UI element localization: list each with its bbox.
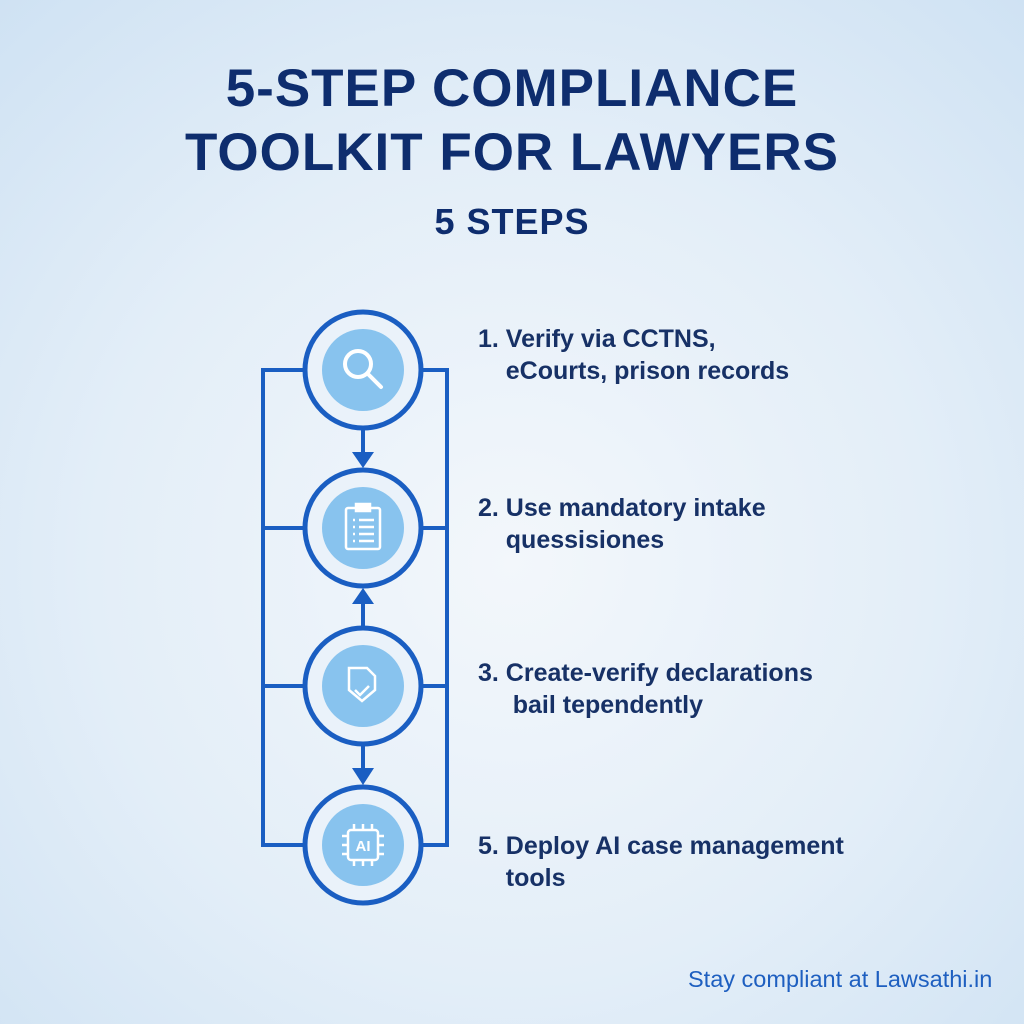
step 3 text: bail tependently bbox=[513, 691, 703, 719]
step 3 text bbox=[478, 659, 813, 719]
icon: clipboard bbox=[346, 504, 380, 549]
step 1 text bbox=[478, 325, 789, 385]
icon: magnifier bbox=[345, 351, 381, 387]
icon: shield document bbox=[349, 668, 375, 701]
subtitle: 5 STEPS bbox=[434, 201, 590, 242]
step 1 text: eCourts, prison records bbox=[506, 357, 789, 385]
step 5 text: tools bbox=[506, 864, 566, 892]
step 2 text: quessisiones bbox=[506, 526, 664, 554]
step 1 text: 1. Verify via CCTNS, bbox=[478, 325, 716, 353]
title bbox=[185, 59, 839, 182]
title: TOOLKIT FOR LAWYERS bbox=[185, 123, 839, 182]
step 5 text: 5. Deploy AI case management bbox=[478, 832, 844, 860]
step circles bbox=[305, 312, 421, 903]
step 2 text: 2. Use mandatory intake bbox=[478, 494, 766, 522]
icon: AI chip bbox=[342, 824, 384, 866]
footer: Stay compliant at Lawsathi.in bbox=[688, 966, 992, 992]
step circles: AI bbox=[356, 838, 370, 855]
title: 5-STEP COMPLIANCE bbox=[226, 59, 798, 118]
step 3 text: 3. Create-verify declarations bbox=[478, 659, 813, 687]
step 5 text bbox=[478, 832, 844, 892]
step 2 text bbox=[478, 494, 766, 554]
